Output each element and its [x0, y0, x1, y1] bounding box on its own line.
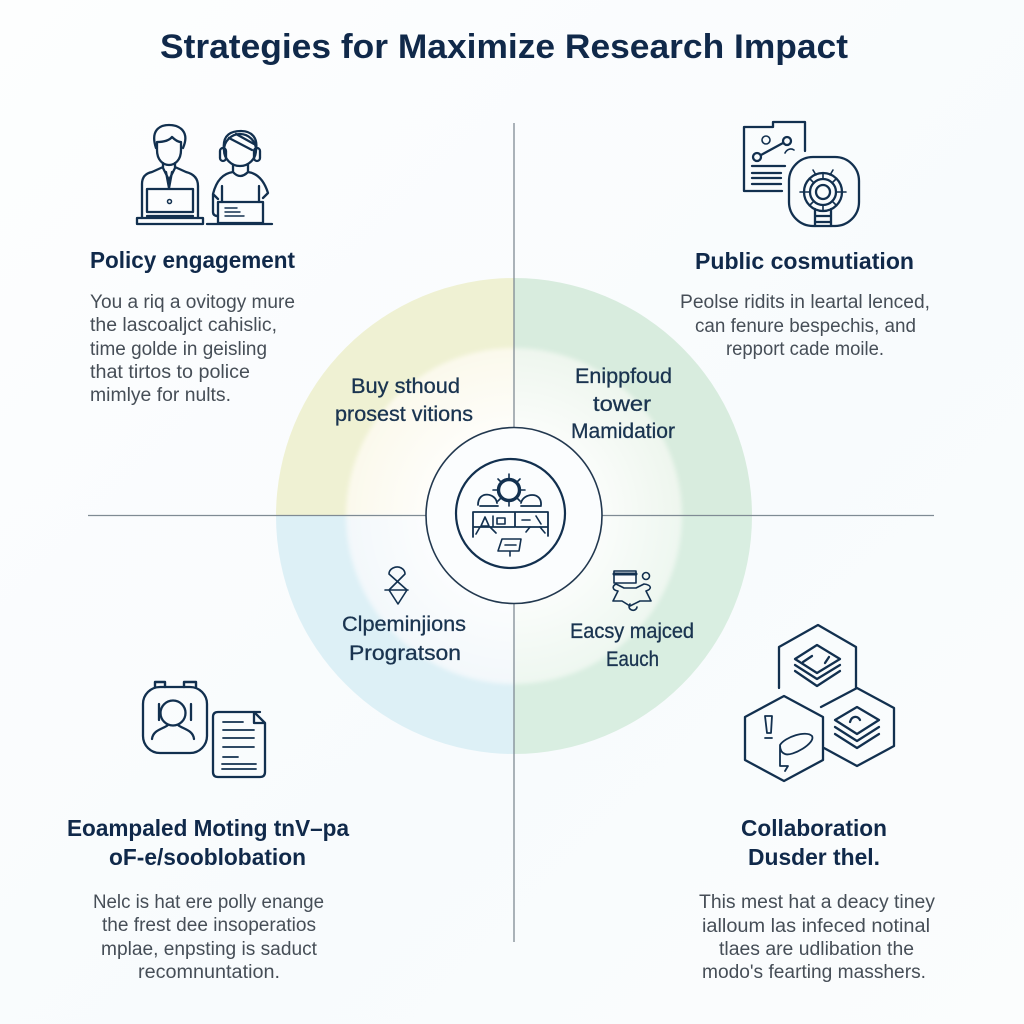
text block: [90, 292, 295, 406]
quadrant circle: [276, 278, 752, 754]
icon: gear and screens: [473, 474, 548, 556]
heading: Dusder thel.: [748, 844, 880, 870]
text block: mimlye for nults.: [90, 385, 231, 406]
text block: recomnuntation.: [138, 962, 280, 983]
icon: three hexagons: [745, 625, 894, 781]
icon: small device: [613, 571, 651, 610]
text block: that tirtos to police: [90, 362, 250, 383]
heading: Collaboration: [741, 815, 887, 841]
quadrant label: bottom left: [342, 613, 466, 665]
quadrant label: bottom right: [570, 620, 694, 671]
text block: Nelc is hat ere polly enange: [93, 892, 324, 913]
icon: two people at laptops: [137, 125, 272, 224]
text block: You a riq a ovitogy mure: [90, 292, 295, 313]
icon: small figure: [385, 567, 408, 604]
text block: can fenure bespechis, and: [695, 316, 916, 337]
title: Strategies for Maximize Research Impact: [160, 28, 848, 66]
quadrant label: top right: [571, 365, 675, 443]
quadrant label: bottom right: Eacsy majced: [570, 620, 694, 643]
center hub: [426, 428, 602, 604]
icon: document and gear badge: [744, 122, 859, 226]
quadrant label: top left: Buy sthoud: [351, 375, 460, 398]
text block: tlaes are udlibation the: [719, 939, 914, 960]
panel: expanded meeting: [67, 682, 349, 983]
text block: modo's fearting masshers.: [702, 962, 926, 983]
text block: [93, 892, 324, 983]
text block: Peolse ridits in leartal lenced,: [680, 292, 930, 313]
quadrant label: top right: Enippfoud: [575, 365, 672, 388]
panel: collaboration: [699, 625, 936, 983]
text block: repport cade moile.: [726, 339, 884, 360]
quadrant label: top left: [335, 375, 473, 426]
panel: public consultation: [680, 122, 930, 360]
text block: ialloum las infeced notinal: [702, 916, 930, 937]
text block: [680, 292, 930, 360]
quadrant label: top left: prosest vitions: [335, 403, 473, 426]
heading: [741, 815, 887, 870]
text block: the frest dee insoperatios: [102, 915, 316, 936]
text block: mplae, enpsting is saduct: [101, 939, 318, 960]
text block: This mest hat a deacy tiney: [699, 892, 936, 913]
quadrant label: bottom left: Clpeminjions: [342, 613, 466, 636]
icon: profile badge and document: [143, 682, 265, 777]
text block: the lascoaljct cahislic,: [90, 315, 277, 336]
quadrant label: top right: Mamidatior: [571, 420, 675, 443]
text block: [699, 892, 936, 983]
heading: oF-e/sooblobation: [109, 844, 306, 870]
heading: [67, 815, 349, 870]
quadrant label: bottom right: Eauch: [606, 648, 659, 671]
heading: Eoampaled Moting tnV–pa: [67, 815, 349, 841]
heading: Public cosmutiation: [695, 248, 914, 274]
panel: policy engagement: [90, 125, 295, 406]
quadrant label: bottom left: Progratson: [349, 642, 461, 665]
text block: time golde in geisling: [90, 339, 267, 360]
heading: Policy engagement: [90, 247, 295, 273]
quadrant label: top right: tower: [593, 393, 651, 416]
